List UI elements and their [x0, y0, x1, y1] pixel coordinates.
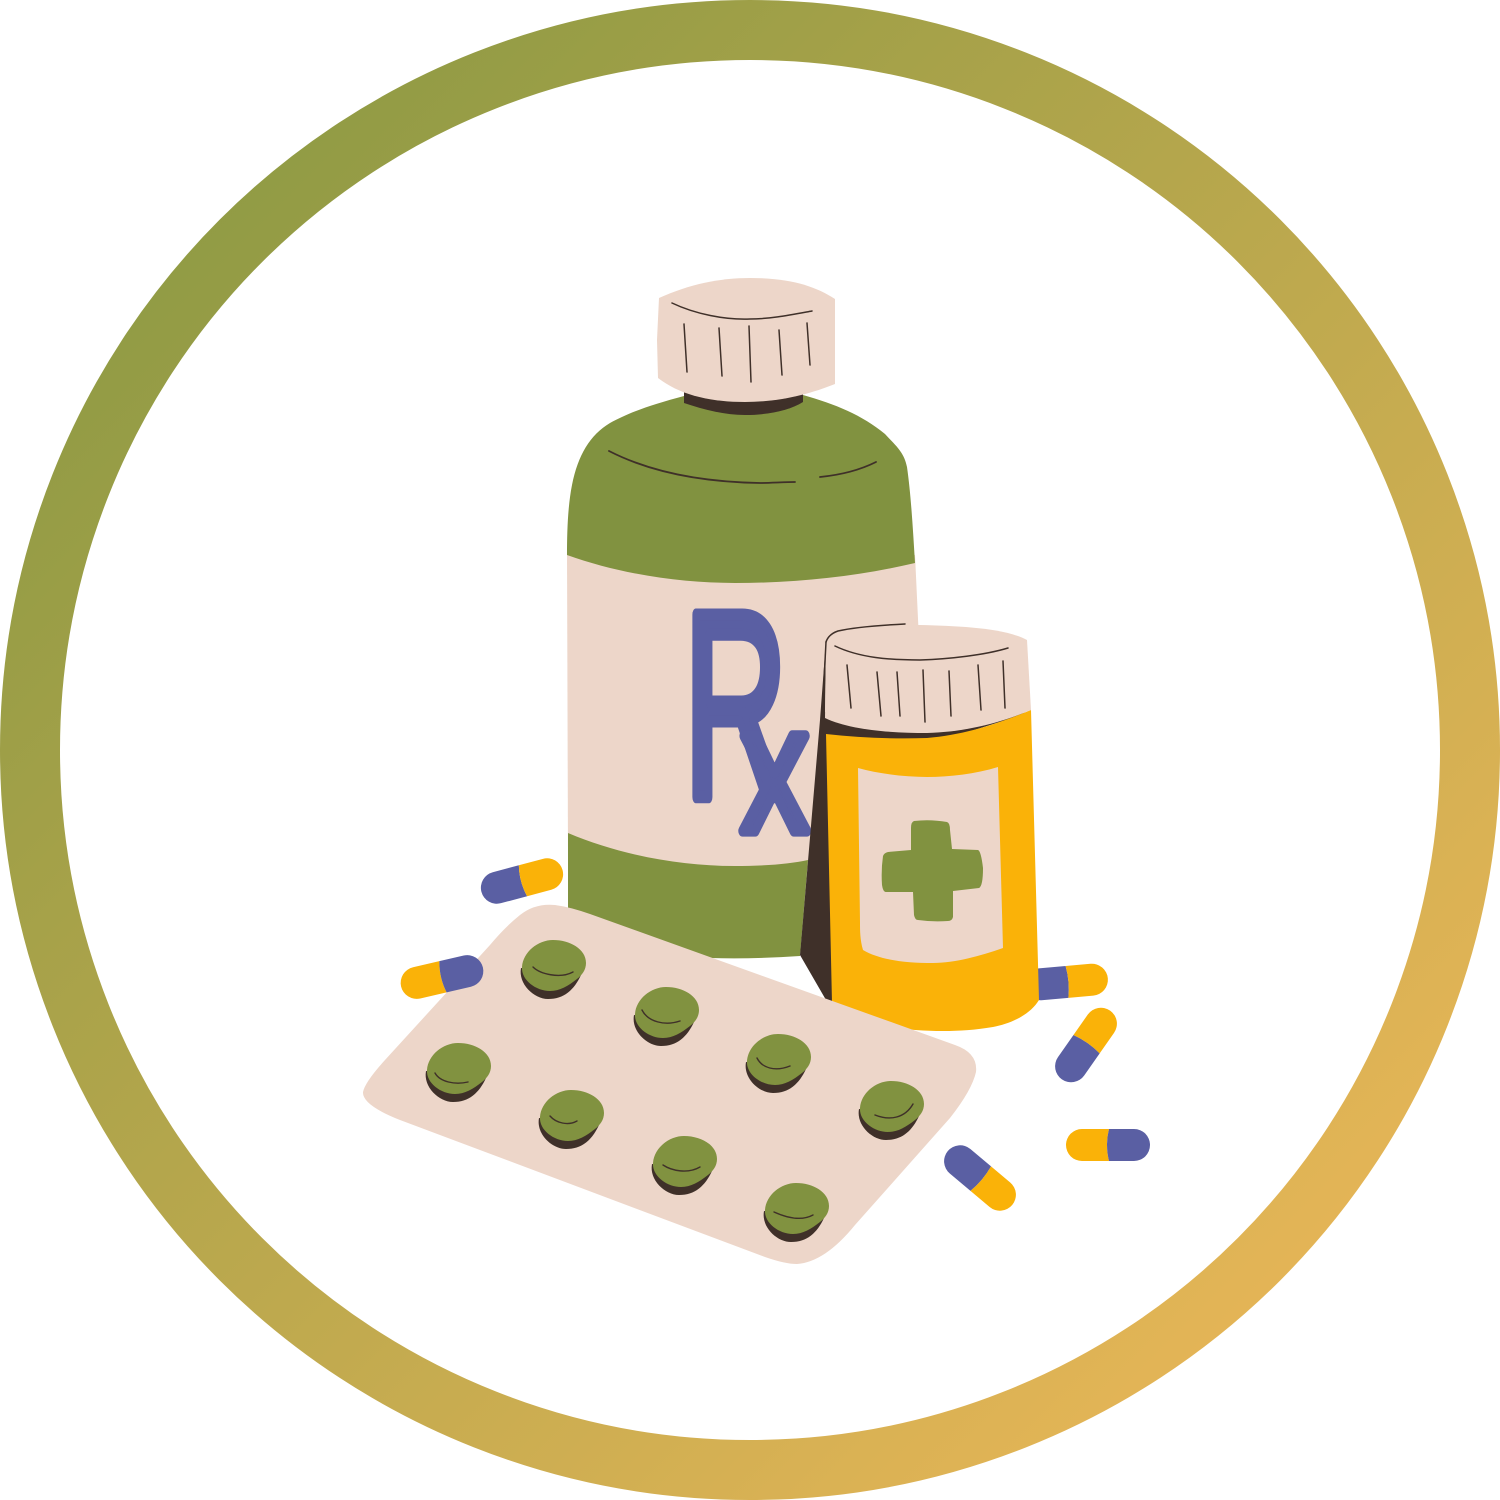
large Rx bottle	[567, 278, 919, 958]
capsule: right horizontal	[1066, 1129, 1150, 1161]
bottle label area	[567, 550, 919, 870]
Rx symbol: x	[741, 668, 808, 869]
cap detail lines	[823, 624, 1008, 722]
green cross	[882, 820, 983, 921]
blister pack	[363, 905, 976, 1264]
blister card	[363, 905, 976, 1264]
dark side panel	[800, 640, 1031, 1004]
Rx symbol: R	[684, 558, 787, 854]
bottle cap	[825, 625, 1031, 733]
cap detail lines	[672, 303, 812, 382]
capsule: lower diagonal	[938, 1139, 1022, 1217]
shoulder detail lines	[609, 451, 876, 483]
tablets	[426, 940, 924, 1242]
capsule: left on blister	[397, 952, 487, 1002]
bottle upper green shoulder	[567, 395, 915, 583]
bottle lower green band	[568, 833, 808, 958]
tablet highlights	[435, 967, 913, 1218]
bottle neck	[684, 392, 803, 415]
capsule: right diagonal	[1049, 1001, 1123, 1089]
capsule: upper left	[477, 855, 567, 907]
bottle cap	[657, 278, 835, 402]
white label	[858, 767, 1003, 963]
orange body	[826, 710, 1039, 1031]
capsule: behind small bottle	[1023, 962, 1109, 1002]
small orange bottle	[800, 624, 1039, 1031]
